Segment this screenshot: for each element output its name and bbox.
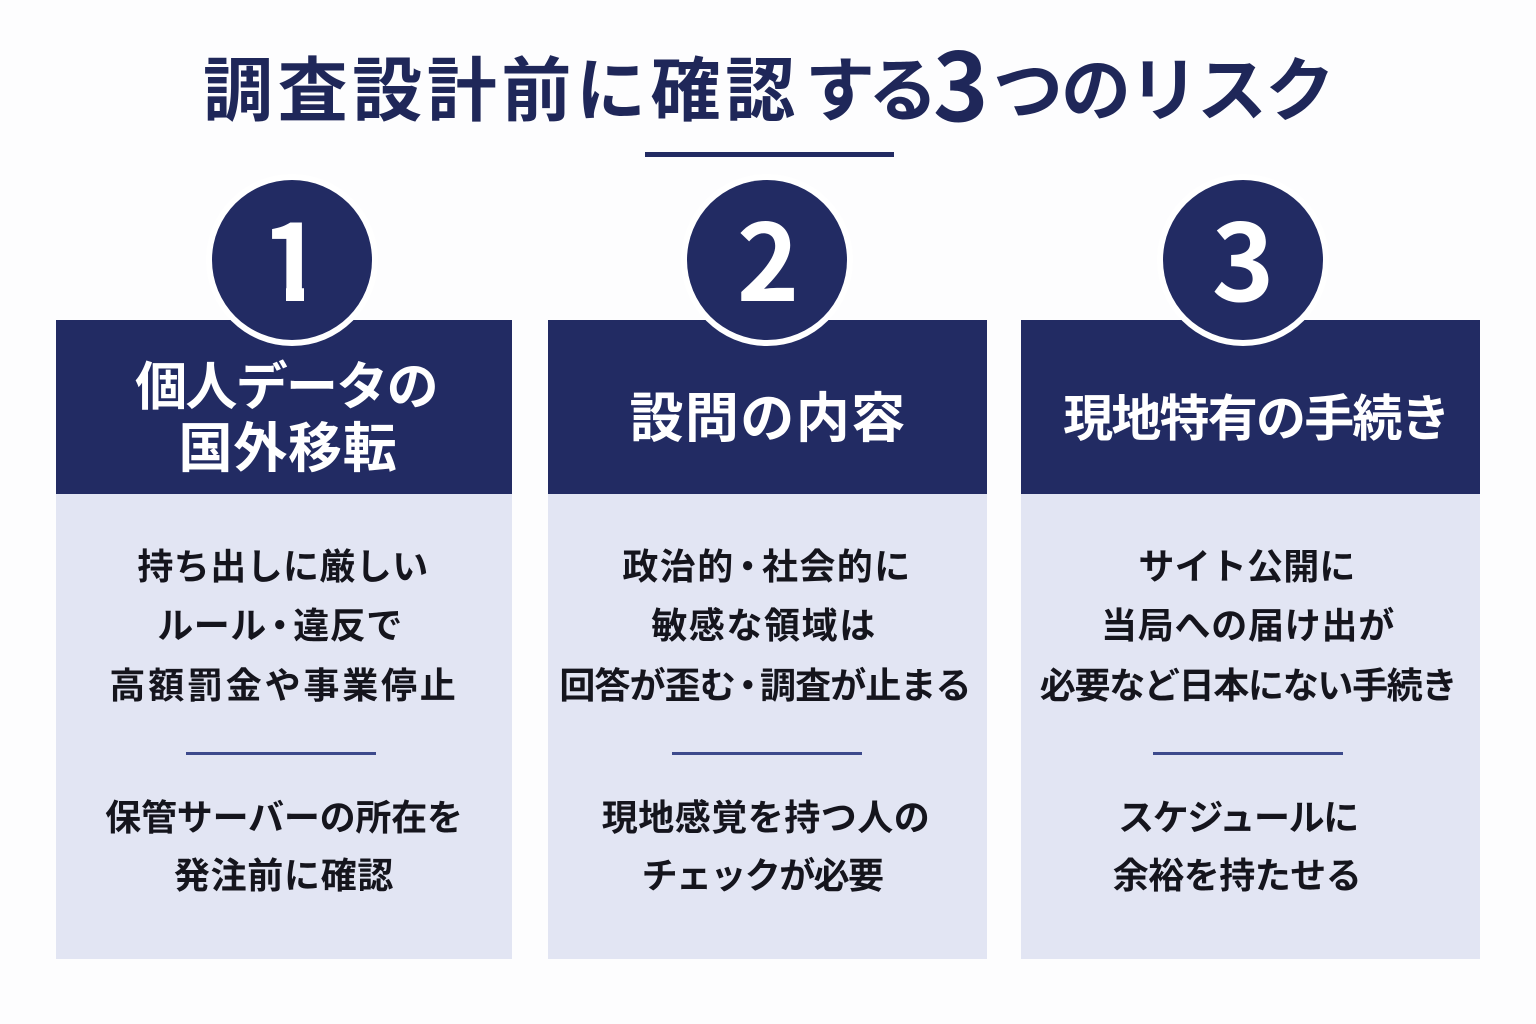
heading: risk 3: 現地特有の手続き bbox=[1063, 391, 1449, 447]
risk 2 description: 政治的 社会的に bbox=[622, 546, 912, 587]
risk 1 description: 高額罰金や事業停止 bbox=[109, 665, 459, 706]
risk 1 description bbox=[109, 546, 459, 706]
risk 2 description: ・ bbox=[730, 546, 767, 587]
circle outline 2 bbox=[681, 174, 853, 346]
number 2: 2 bbox=[737, 178, 799, 332]
risk 2 description: 敏感な領域は bbox=[651, 605, 877, 646]
risk 3 description bbox=[1040, 546, 1456, 706]
risk 3 action: スケジュールに bbox=[1118, 797, 1358, 838]
risk 2 action: チェックが必要 bbox=[642, 855, 882, 896]
risk 1 action: 発注前に確認 bbox=[174, 855, 394, 896]
panel: risk 3 bbox=[1021, 320, 1480, 959]
risk 2 action bbox=[602, 797, 930, 896]
panel 1 header band bbox=[56, 320, 512, 494]
number 3: 3 bbox=[1212, 178, 1274, 332]
risk 1 action: 保管サーバーの所在を bbox=[105, 797, 463, 838]
panel 3 header band bbox=[1021, 320, 1480, 494]
risk 2 description: 回答が歪む 調査が止まる bbox=[559, 665, 971, 706]
risk 2 description: ・ bbox=[730, 665, 765, 706]
number 1: 1 bbox=[261, 178, 323, 332]
risk 1 description: ルール 違反で bbox=[157, 605, 403, 646]
heading: risk 1: 個人データの bbox=[135, 359, 437, 417]
panel 2 header band bbox=[548, 320, 987, 494]
divider 1 bbox=[186, 752, 376, 755]
title: つのリスク bbox=[993, 52, 1333, 130]
title bbox=[203, 12, 1333, 148]
panel: risk 2 bbox=[548, 320, 987, 959]
divider 2 bbox=[672, 752, 862, 755]
circle outline 3 bbox=[1157, 174, 1329, 346]
risk 1 action bbox=[105, 797, 463, 896]
risk 2 action: 現地感覚を持つ人の bbox=[602, 797, 930, 838]
risk 3 description: サイト公開に bbox=[1138, 546, 1356, 587]
heading: risk 2: 設問の内容 bbox=[630, 389, 906, 449]
risk 3 description: 当局への届け出が bbox=[1101, 605, 1395, 646]
title: する bbox=[805, 52, 931, 130]
risk 1 description: 持ち出しに厳しい bbox=[137, 546, 429, 587]
circle badge 1 bbox=[212, 180, 372, 340]
risk 2 description bbox=[559, 546, 971, 706]
circle badge 2 bbox=[687, 180, 847, 340]
heading: risk 1: 国外移転 bbox=[178, 419, 398, 479]
circle outline 1 bbox=[206, 174, 378, 346]
circle badge 3 bbox=[1163, 180, 1323, 340]
title: 3 bbox=[933, 12, 988, 148]
title underline bbox=[645, 152, 894, 157]
title: 調査設計前に確認 bbox=[203, 52, 800, 130]
risk 3 action: 余裕を持たせる bbox=[1113, 855, 1361, 896]
risk 3 action bbox=[1113, 797, 1361, 896]
risk 3 description: 必要など日本にない手続き bbox=[1040, 665, 1456, 706]
risk 1 description: ・ bbox=[262, 605, 298, 646]
divider 3 bbox=[1153, 752, 1343, 755]
panel: risk 1 bbox=[56, 320, 512, 959]
heading: risk 1 bbox=[135, 359, 437, 479]
